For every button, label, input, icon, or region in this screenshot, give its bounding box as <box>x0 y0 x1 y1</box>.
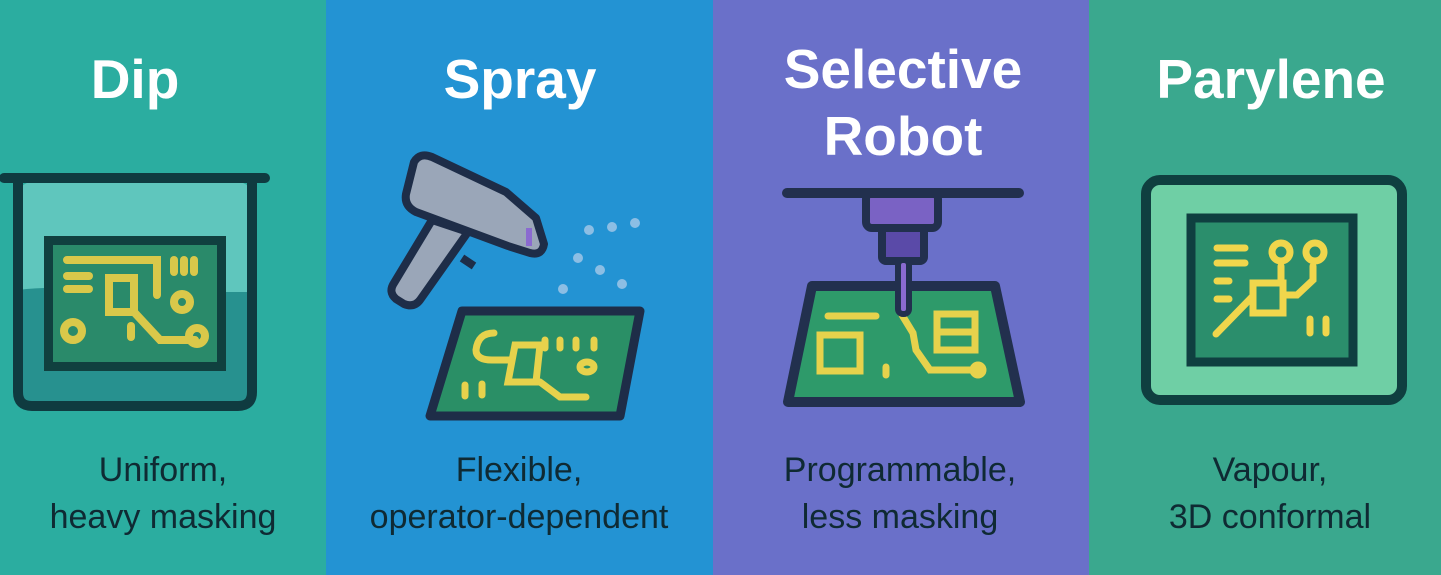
caption: dip: Uniform, <box>99 451 227 489</box>
spray particles <box>558 218 640 294</box>
heading: Spray: Spray <box>444 48 597 110</box>
caption: selective robot: Programmable, <box>784 451 1016 489</box>
caption: spray: Flexible, <box>456 451 582 489</box>
panel: parylene: 3D conformal <box>1169 498 1371 536</box>
panel: dip: heavy masking <box>50 498 276 536</box>
caption: parylene: Vapour, <box>1213 451 1327 489</box>
panel: spray: operator-dependent <box>370 498 669 536</box>
panel: selective robot: less masking <box>802 498 998 536</box>
heading: Selective Robot: Selective <box>784 38 1022 100</box>
panel: selective robot <box>713 0 1089 575</box>
panel: selective robot: Robot <box>824 105 982 167</box>
icon: robot dispenser <box>787 193 1020 402</box>
panel: dip <box>0 0 326 575</box>
icon: pcb board <box>430 311 640 416</box>
heading: Parylene: Parylene <box>1156 48 1386 110</box>
panel: spray <box>326 0 713 575</box>
heading: Dip: Dip <box>91 48 179 110</box>
panel: parylene <box>1089 0 1441 575</box>
icon: dip tank with pcb <box>4 178 265 406</box>
icon: coated pcb <box>1146 180 1402 400</box>
icon: spray gun <box>391 155 544 305</box>
